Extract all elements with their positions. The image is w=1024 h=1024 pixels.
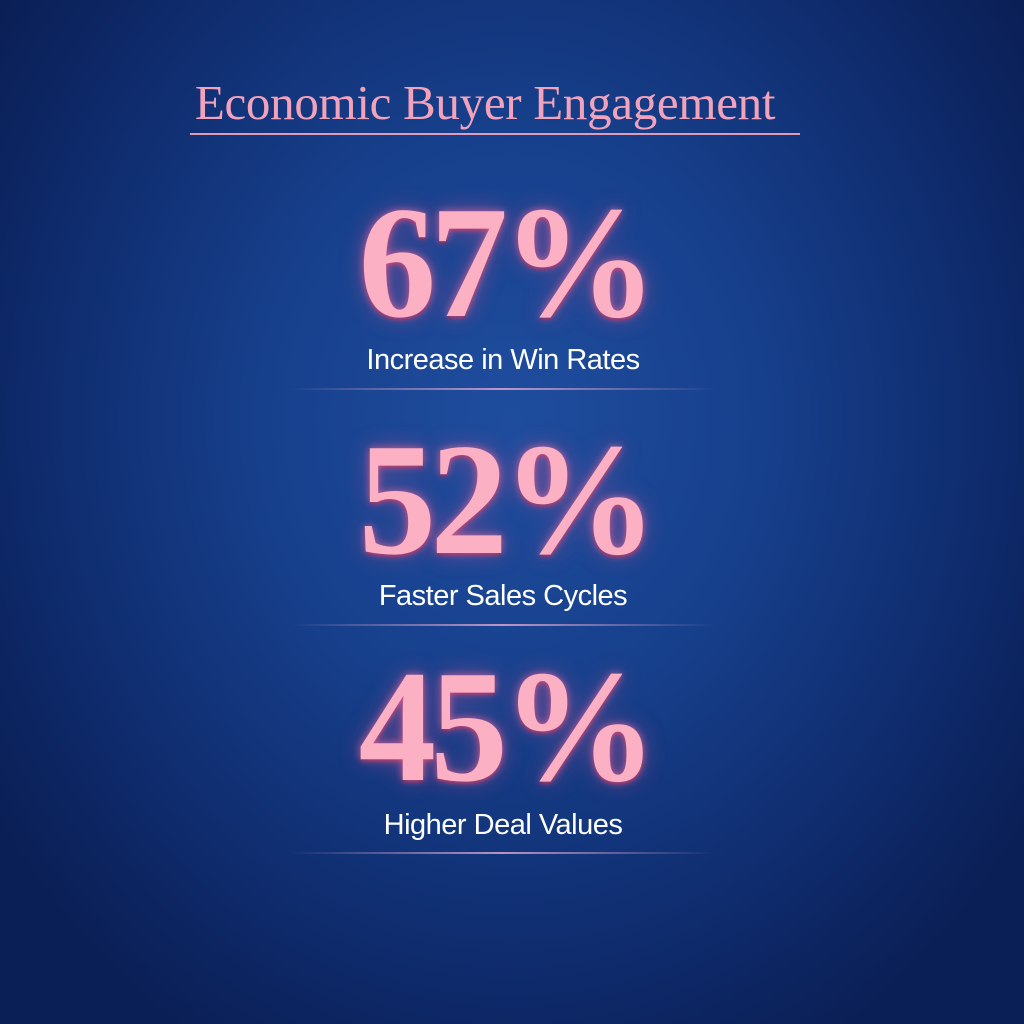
stat: 67%: 67% — [359, 173, 651, 351]
title underline — [190, 133, 800, 135]
label: sales cycles: Faster Sales Cycles — [379, 580, 627, 612]
title: Economic Buyer Engagement — [195, 75, 775, 130]
label: win rates: Increase in Win Rates — [366, 344, 640, 376]
stat: 52%: 52% — [359, 410, 651, 588]
label: deal values: Higher Deal Values — [384, 809, 622, 841]
stat: 45%: 45% — [359, 637, 651, 815]
